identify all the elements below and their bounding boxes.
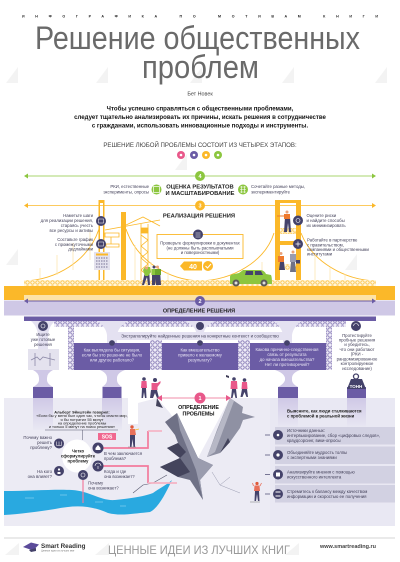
eyebrow: ИНФОГРАФИКА ПО МОТИВАМ КНИГИ [22, 14, 378, 18]
stage 4 heading: ОЦЕНКА РЕЗУЛЬТАТОВ [166, 184, 234, 190]
lead text: следует тщательно анализировать их причины, искать решения в сотрудничестве [74, 114, 327, 121]
icon: calendar [94, 252, 110, 270]
right test column [337, 321, 378, 371]
tagline: ЦЕННЫЕ ИДЕИ ИЗ ЛУЧШИХ КНИГ [108, 543, 290, 557]
left tower notes: все ресурсы и активы [50, 228, 93, 233]
stage 2 heading: ОПРЕДЕЛЕНИЕ РЕШЕНИЯ [163, 308, 235, 314]
problem centre: сформулируйте [61, 454, 96, 458]
research item 1: интервьюирование, сбор «цифровых следов», [287, 433, 380, 438]
workers on tower [277, 210, 300, 272]
weight: ТОНН [350, 384, 362, 389]
bridge [4, 200, 395, 316]
logo: Ценные идеи из лучших книг [41, 550, 75, 552]
left tower notes [41, 213, 106, 252]
problem centre: Четко [72, 448, 84, 454]
stage dots [177, 151, 222, 159]
stage 3 line [24, 200, 376, 210]
icon: stage 2 markers [109, 322, 290, 346]
stages heading: РЕШЕНИЕ ЛЮБОЙ ПРОБЛЕМЫ СОСТОИТ ИЗ ЧЕТЫРЕХ ЭТАПОВ: [103, 141, 297, 149]
pink pipes [83, 431, 177, 503]
research item 1: Источники данных: [287, 428, 325, 433]
cables [24, 229, 376, 281]
SOS label: SOS [102, 434, 113, 440]
question: who [28, 466, 64, 479]
question: what: В чем заключается [104, 451, 143, 456]
logo [23, 542, 86, 552]
question: why important: проблему? [30, 445, 53, 450]
cracks [212, 472, 240, 493]
question box 2: Как вмешательство [181, 348, 220, 352]
weight [347, 374, 366, 389]
railing [24, 280, 376, 286]
stage 3 line: 3 [198, 204, 202, 210]
question box 3 [250, 340, 326, 370]
website: www.smartreading.ru [319, 544, 376, 550]
question: why important: Почему важно [23, 435, 53, 440]
question box 1: Как выглядела бы ситуация, [84, 348, 140, 352]
quote [36, 410, 128, 440]
lower bridge [24, 316, 376, 398]
icon: check [203, 261, 213, 271]
pier shadows [33, 398, 53, 430]
research item 2: Объединяйте мудрость толпы [287, 450, 347, 455]
research heading: Выясните, как люди сталкиваются [287, 408, 362, 414]
research item 4: информации и скоростью ее получения [287, 494, 367, 499]
right tower [275, 200, 301, 286]
left solutions column: решения [34, 342, 53, 347]
left wall [160, 413, 213, 500]
person with flag [128, 425, 139, 447]
extrapolation banner: Экстраполируйте найденные решения на конкретные контекст и сообщество [121, 334, 279, 339]
question box 3: связь от результата [267, 352, 307, 357]
SOS label [98, 433, 116, 440]
left tower notes: Составьте график [57, 237, 93, 242]
left tower [98, 200, 104, 286]
right test column: Протестируйте [342, 333, 373, 338]
right tower notes: Оцените риски [306, 213, 337, 218]
question box 1: если бы это решение не было [82, 352, 143, 358]
logo: Smart Reading [41, 543, 86, 550]
question box 2 [162, 340, 238, 370]
right tower notes [293, 213, 369, 256]
label 40 [180, 262, 202, 271]
right test column: и убедитесь, [344, 342, 370, 347]
quote: я бы потратил 55 минут [61, 417, 104, 422]
research item 3 [265, 470, 355, 480]
stage 1 heading: ПРОБЛЕМЫ [183, 412, 214, 418]
left tower notes: Наметьте шаги [63, 213, 94, 218]
right test column: (РКИ - [351, 352, 364, 356]
research item 4: Стремитесь к балансу между качеством [287, 489, 367, 494]
quote: на определение проблемы [58, 420, 107, 426]
ground panel [4, 398, 395, 526]
question: what: проблема? [104, 456, 127, 461]
question: when: Когда и где [104, 469, 127, 474]
problem centre [61, 440, 96, 472]
lead text: с гражданами, использовать инновационные подходы и инструменты. [92, 122, 308, 130]
right test column: пробные решения [339, 338, 376, 342]
crane [105, 217, 160, 285]
proof box: и поверхностными) [181, 250, 220, 255]
stage 4 line [24, 171, 376, 181]
stage 4 line: 4 [198, 174, 202, 180]
question box 3: Нет ли противоречий? [265, 362, 310, 367]
question box 3: до начала вмешательства? [260, 357, 315, 362]
right tower notes: Работайте в партнерстве [307, 238, 358, 242]
people: stage 1 left [141, 377, 160, 398]
workers [142, 266, 161, 285]
stage 2 line: 2 [198, 299, 202, 305]
research item 2 [265, 450, 347, 460]
question box 1: или другое работало? [90, 358, 135, 362]
piers [31, 321, 55, 350]
research item 3: Анализируйте мнения с помощью [287, 470, 355, 474]
title: Решение общественных [35, 20, 360, 56]
question box 2: результату? [188, 358, 213, 362]
stage 1 marker [157, 392, 231, 404]
left solutions column [28, 321, 59, 370]
stage 1 marker: 1 [198, 396, 202, 402]
lilac deck [4, 300, 395, 316]
question: when: она возникает? [104, 474, 135, 479]
left tower notes: с промежуточными [55, 242, 94, 247]
question: why arises [78, 470, 119, 490]
question: why important: решить [37, 440, 53, 445]
research heading: с проблемой в реальной жизни [287, 414, 355, 418]
research item 1: краудсорсинг, вики-опросы [287, 438, 341, 443]
proof box: (не должны быть расплывчатыми [166, 246, 234, 250]
girder [24, 316, 376, 321]
footer [4, 538, 395, 557]
author: Бет Новек [187, 92, 213, 98]
lattice [54, 321, 346, 326]
right tower notes: институтами [307, 252, 333, 256]
research item 4 [265, 489, 367, 499]
car [230, 270, 272, 286]
quote: Альберт Эйнштейн говорил: [54, 410, 110, 414]
stage 4 right note [238, 184, 305, 194]
right wall [207, 398, 255, 457]
stage 3 heading: РЕАЛИЗАЦИЯ РЕШЕНИЯ [163, 214, 235, 220]
left solutions column: Ищите [36, 332, 50, 337]
proof box [157, 230, 243, 258]
left tower notes: дедлайнами [68, 246, 94, 252]
question: what [92, 442, 143, 461]
question: who: На кого [37, 469, 53, 474]
question: who: она влияет? [28, 474, 53, 479]
crack shards [133, 398, 255, 500]
river [4, 480, 172, 515]
people: stage 1 right [226, 375, 248, 398]
title [35, 20, 360, 85]
research item 1 [265, 428, 380, 443]
research item 3: искусственного интеллекта [287, 474, 342, 480]
stage 4 heading: И МАСШТАБИРОВАНИЕ [166, 191, 235, 197]
quote: «Если бы у меня был один час, чтобы спасти мир, [36, 413, 128, 418]
right test column: что они работают [339, 347, 375, 352]
label 40: 40 [189, 264, 197, 271]
left solutions column: уже готовые [31, 337, 56, 342]
right test column: контролируемое [341, 361, 374, 366]
extrapolation banner [115, 332, 285, 340]
stage 4 left note [103, 184, 162, 194]
question: why arises: она возникает? [88, 486, 119, 490]
question: when [92, 460, 135, 479]
upper deck platforms [280, 228, 296, 234]
stage 2 line [24, 296, 376, 306]
research bands [275, 427, 395, 502]
lead text: Чтобы успешно справляться с общественными проблемами, [107, 106, 294, 112]
title: проблем [142, 49, 259, 85]
stage 4 right note: экспериментируйте [251, 190, 291, 194]
question box 3: Какова причинно-следственная [255, 347, 319, 352]
stage 4 right note: Сочетайте разные методы, [251, 184, 305, 189]
question box 2: привело к желаемому [178, 352, 223, 358]
proof box: Проверьте формулировки в документах [160, 240, 241, 246]
right tower notes: с правительством, [307, 242, 344, 248]
stage 4 left note: эксперименты, опросы [103, 190, 149, 194]
orange road [4, 286, 395, 300]
right tower notes: компаниями и общественными [307, 247, 369, 252]
quote: и только 5 минут на поиск решения» [49, 424, 115, 429]
research item 2: с экспертными знаниями [287, 455, 337, 460]
stage 1 heading: ОПРЕДЕЛЕНИЕ [178, 405, 219, 411]
stage 4 left note: РКИ, естественные [110, 184, 150, 189]
left tower notes: стараясь учесть [61, 223, 94, 228]
question: why arises: Почему [88, 480, 104, 486]
question box 1 [74, 340, 150, 370]
person with phone [250, 482, 262, 502]
left tower notes: для реализации решения, [41, 218, 93, 223]
right test column: исследование) [342, 366, 372, 371]
question: why important [23, 435, 64, 450]
right tower notes: их минимизировать [306, 223, 346, 228]
center tower [121, 212, 126, 286]
problem centre: проблему [68, 458, 89, 464]
right test column: рандомизированное [337, 356, 378, 362]
right tower notes: и найдите способы [306, 218, 345, 223]
